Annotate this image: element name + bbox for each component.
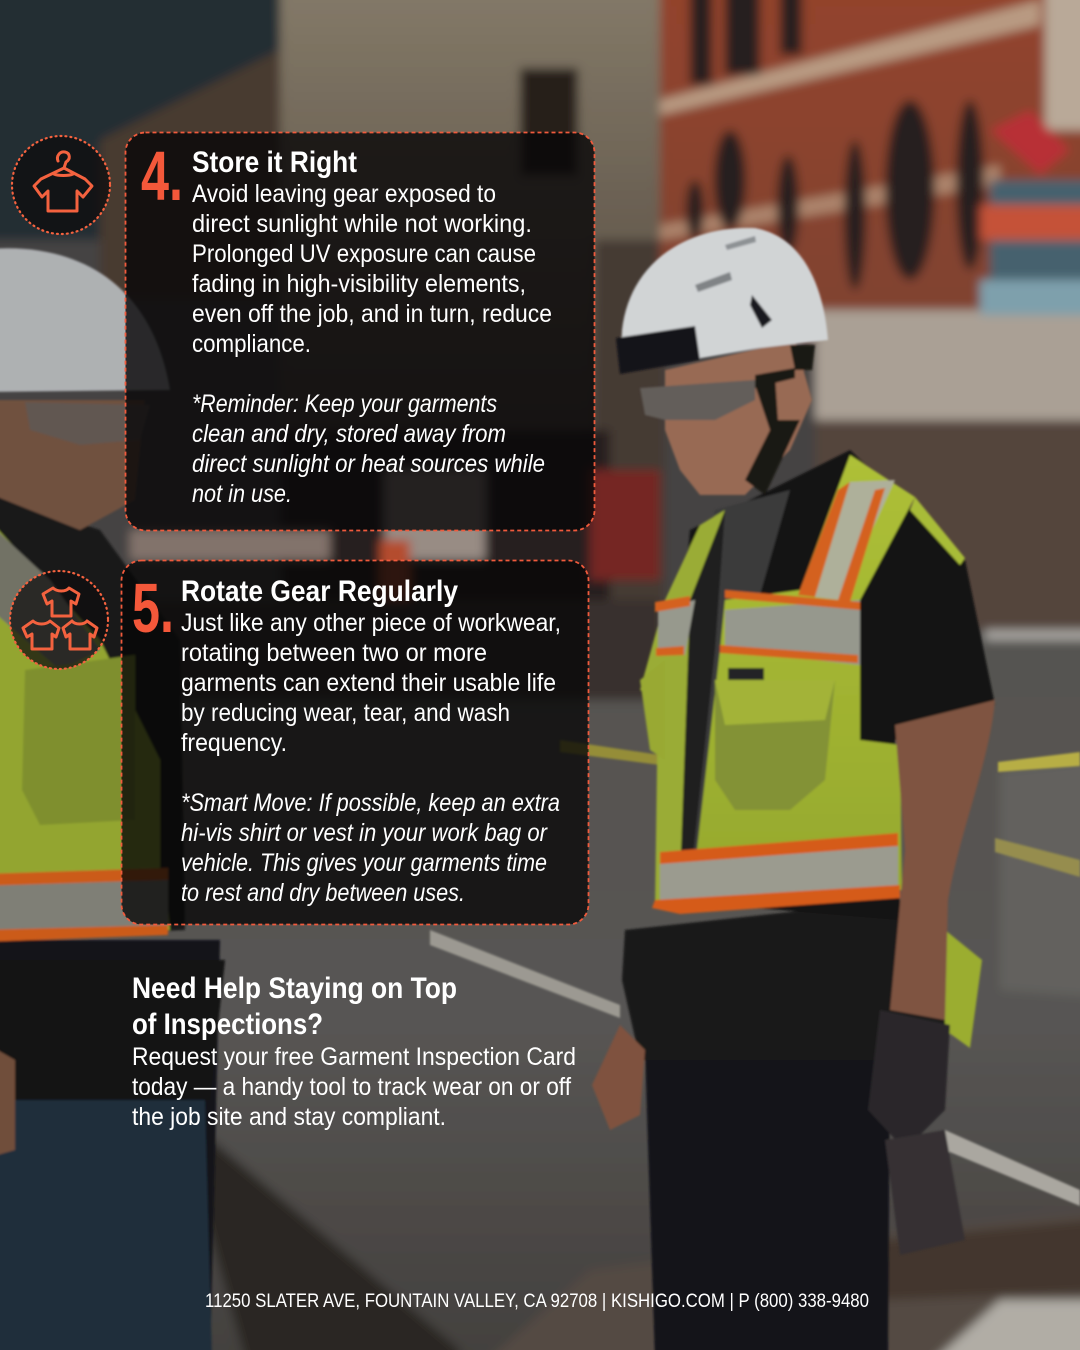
helmet bbox=[620, 228, 828, 372]
reminder note: not in use. bbox=[192, 480, 292, 508]
body text: store it right: direct sunlight while not working. bbox=[192, 210, 532, 238]
body text: store it right: Avoid leaving gear exposed to bbox=[192, 180, 496, 208]
body text: rotate gear regularly: frequency. bbox=[181, 729, 287, 757]
body text: store it right: even off the job, and in turn, reduce bbox=[192, 300, 552, 328]
hi-vis vest bbox=[690, 455, 915, 910]
body text: request card: Request your free Garment Inspection Card bbox=[132, 1043, 576, 1071]
heading: need help bbox=[132, 972, 457, 1041]
body text: request card: today — a handy tool to track wear on or off bbox=[132, 1073, 571, 1101]
heading: need help: Need Help Staying on Top bbox=[132, 972, 457, 1005]
body text: store it right: compliance. bbox=[192, 330, 311, 358]
body text: rotate gear regularly bbox=[181, 609, 561, 757]
heading: rotate gear regularly: Rotate Gear Regularly bbox=[181, 575, 458, 608]
smart move note: vehicle. This gives your garments time bbox=[181, 849, 547, 877]
icon: shirt on hanger bbox=[12, 136, 110, 234]
heading: need help: of Inspections? bbox=[132, 1008, 323, 1041]
smart move note bbox=[181, 789, 560, 907]
number 4: 4. bbox=[141, 137, 183, 215]
grey undershirt bbox=[680, 490, 790, 890]
heading: store it right: Store it Right bbox=[192, 146, 357, 179]
smart move note: to rest and dry between uses. bbox=[181, 879, 465, 907]
smart move note: *Smart Move: If possible, keep an extra bbox=[181, 789, 560, 817]
reminder note: clean and dry, stored away from bbox=[192, 420, 506, 448]
body text: rotate gear regularly: by reducing wear, tear, and wash bbox=[181, 699, 510, 727]
arm bbox=[890, 700, 995, 1020]
body text: request card: the job site and stay compliant. bbox=[132, 1103, 446, 1131]
body text: rotate gear regularly: Just like any other piece of workwear, bbox=[181, 609, 561, 637]
number 5: 5. bbox=[132, 569, 174, 647]
body text: store it right: Prolonged UV exposure can cause bbox=[192, 240, 536, 268]
call to action bbox=[132, 972, 576, 1131]
reminder note bbox=[192, 390, 545, 508]
body text: request card bbox=[132, 1043, 576, 1131]
worker right bbox=[645, 1040, 890, 1350]
body text: store it right bbox=[192, 180, 552, 358]
panel: tip 5 rotate gear regularly bbox=[122, 560, 588, 924]
black t-shirt bbox=[660, 450, 995, 920]
body text: rotate gear regularly: garments can extend their usable life bbox=[181, 669, 556, 697]
icon: three shirts bbox=[10, 571, 108, 669]
smart move note: hi-vis shirt or vest in your work bag or bbox=[181, 819, 548, 847]
body text: store it right: fading in high-visibility elements, bbox=[192, 270, 526, 298]
face bbox=[665, 340, 812, 495]
body text: rotate gear regularly: rotating between two or more bbox=[181, 639, 487, 667]
panel: tip 4 store it right bbox=[126, 132, 594, 530]
footer contact line: 11250 SLATER AVE, FOUNTAIN VALLEY, CA 92708 | KISHIGO.COM | P (800) 338-9480 bbox=[205, 1291, 869, 1312]
reminder note: direct sunlight or heat sources while bbox=[192, 450, 545, 478]
reminder note: *Reminder: Keep your garments bbox=[192, 390, 497, 418]
worker left bbox=[0, 940, 220, 1350]
